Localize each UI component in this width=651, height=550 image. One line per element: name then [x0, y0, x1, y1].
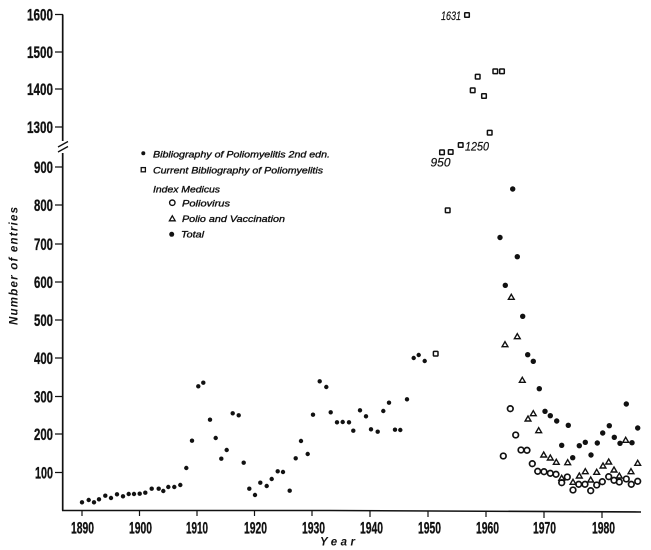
- y axis with ticks and labels: 700: [34, 236, 53, 254]
- x axis with ticks and labels: 1920: [244, 520, 267, 538]
- y axis with ticks and labels: 400: [34, 350, 53, 368]
- y axis with ticks and labels: 1400: [27, 81, 53, 99]
- legend: Bibliography of Poliomyelitis 2nd edn.: [153, 150, 330, 160]
- x axis with ticks and labels: 1940: [360, 520, 383, 538]
- y axis with ticks and labels: 1600: [27, 6, 53, 24]
- x axis with ticks and labels: 1970: [533, 520, 556, 538]
- y axis with ticks and labels: 200: [34, 426, 53, 444]
- legend: Index Medicus: [153, 184, 220, 196]
- legend: Poliovirus: [182, 198, 230, 210]
- x axis with ticks and labels: 1960: [476, 520, 499, 538]
- x axis with ticks and labels: 1930: [302, 520, 325, 538]
- x axis with ticks and labels: 1910: [186, 520, 208, 538]
- y axis with ticks and labels: 300: [34, 388, 53, 406]
- y axis with ticks and labels: 600: [34, 274, 53, 292]
- x axis with ticks and labels: 1950: [418, 520, 441, 538]
- data annotations: 1250: [465, 140, 489, 154]
- legend: [141, 150, 330, 240]
- series: Bibliography of Poliomyelitis 2nd edn.: [80, 353, 427, 504]
- y axis with ticks and labels: 100: [35, 464, 53, 482]
- y axis with ticks and labels: 900: [34, 159, 53, 177]
- y axis with ticks and labels: [27, 6, 68, 510]
- x axis with ticks and labels: 1900: [129, 520, 152, 538]
- series: Index Medicus Polio and Vaccination: [502, 294, 641, 484]
- legend: Current Bibliography of Poliomyelitis: [153, 166, 323, 176]
- series: Current Bibliography of Poliomyelitis: [433, 13, 504, 356]
- x axis with ticks and labels: [62, 510, 641, 538]
- data annotations: 950: [430, 156, 451, 170]
- series: Index Medicus Total: [497, 186, 640, 460]
- data annotations: [430, 9, 489, 170]
- x axis with ticks and labels: 1890: [71, 520, 94, 538]
- x axis title: Year: [320, 536, 356, 548]
- y axis with ticks and labels: 1300: [27, 119, 53, 137]
- data annotations: 1631: [441, 9, 461, 23]
- x axis with ticks and labels: 1980: [592, 520, 615, 538]
- y axis with ticks and labels: 800: [34, 197, 53, 215]
- y axis with ticks and labels: 1500: [27, 44, 53, 62]
- legend: Total: [181, 230, 205, 240]
- y axis title: Number of entries: [8, 207, 20, 325]
- y axis with ticks and labels: 500: [34, 312, 53, 330]
- legend: Polio and Vaccination: [182, 214, 285, 225]
- series: Index Medicus Poliovirus: [500, 406, 640, 494]
